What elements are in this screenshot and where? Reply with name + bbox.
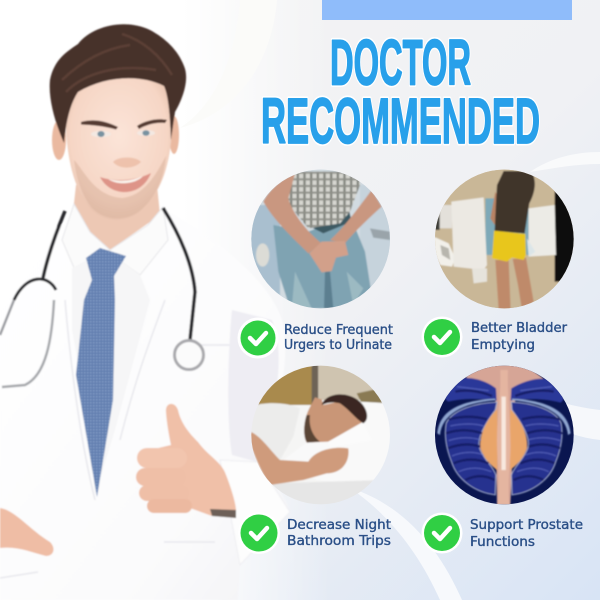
photo: urinals xyxy=(432,165,578,310)
check badge xyxy=(422,512,462,554)
label: Urgers to Urinate xyxy=(284,338,392,353)
lab coat xyxy=(0,208,290,600)
shirt collar xyxy=(62,204,168,275)
eyes xyxy=(91,131,111,137)
label xyxy=(287,518,391,549)
other hand at pocket xyxy=(0,508,53,556)
photo: sleeping man xyxy=(250,360,395,505)
stubble shading xyxy=(74,156,166,218)
illustration: prostate xyxy=(435,365,574,505)
label xyxy=(470,518,583,550)
benefit: reduce frequent urges xyxy=(238,165,395,358)
eyebrows xyxy=(81,120,118,130)
ear right xyxy=(169,116,179,154)
ear left xyxy=(52,120,66,160)
doctor figure xyxy=(0,24,290,600)
check badge xyxy=(238,512,280,554)
label: Reduce Frequent xyxy=(284,323,393,338)
face xyxy=(66,75,172,220)
benefit: decrease night trips xyxy=(238,360,395,554)
coat folds xyxy=(0,300,240,578)
nose xyxy=(113,158,141,168)
label xyxy=(284,323,393,353)
benefit: support prostate xyxy=(422,365,583,554)
label: Functions xyxy=(470,535,535,550)
photo: jeans xyxy=(250,165,395,312)
label: Better Bladder xyxy=(471,321,568,336)
hair and face xyxy=(50,24,186,220)
mouth xyxy=(100,173,151,192)
title: DOCTOR xyxy=(330,26,471,98)
label xyxy=(471,321,568,353)
title: DOCTOR xyxy=(330,26,471,98)
stethoscope xyxy=(0,208,204,387)
label: Support Prostate xyxy=(470,518,583,533)
label: Bathroom Trips xyxy=(287,534,391,549)
necktie xyxy=(76,248,126,497)
check badge xyxy=(238,318,278,358)
label: Decrease Night xyxy=(287,518,391,533)
title xyxy=(261,26,540,157)
check badge xyxy=(422,316,462,358)
thumbs-up hand xyxy=(136,404,236,518)
neck xyxy=(72,175,160,250)
hair xyxy=(50,24,186,143)
top blue bar xyxy=(322,0,572,20)
benefit: better bladder emptying xyxy=(422,165,578,358)
label: Emptying xyxy=(471,338,535,353)
